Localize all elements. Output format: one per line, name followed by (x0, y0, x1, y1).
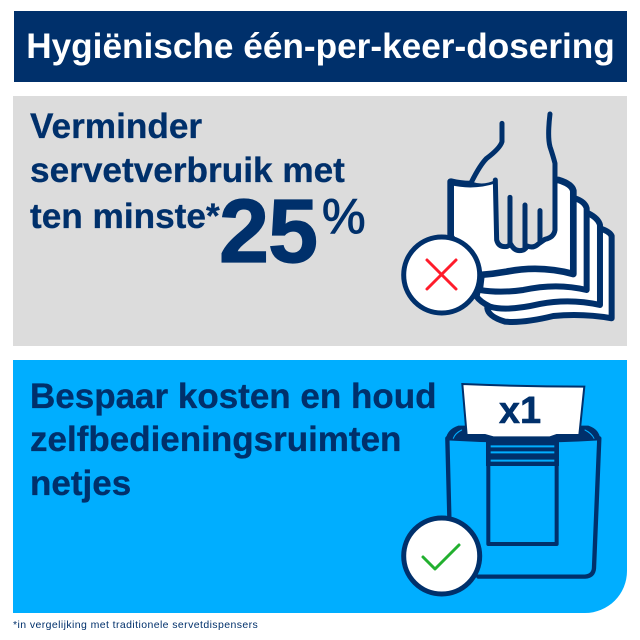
number 25: 25 (219, 182, 317, 282)
badge circle (404, 237, 480, 313)
heading: save costs: zelfbedieningsruimten (30, 420, 401, 459)
dispenser lid (447, 427, 599, 442)
back napkin 4 (487, 228, 612, 322)
front napkin (451, 180, 573, 275)
badge circle (404, 518, 480, 594)
footnote: *in vergelijking met traditionele servetdispensers (13, 619, 258, 631)
lid highlights (453, 430, 594, 438)
cross (427, 260, 456, 289)
icon: green check badge (404, 518, 480, 594)
heading: reduce napkin use: servetverbruik met (30, 151, 345, 190)
check mark (423, 545, 459, 569)
heading: save costs (30, 377, 436, 503)
icon: red cross badge (404, 237, 480, 313)
icon: stack of napkins with hand (451, 114, 612, 322)
wrist left (472, 123, 502, 182)
icon: dispenser (447, 384, 599, 577)
hand (472, 114, 555, 251)
heading: save costs: netjes (30, 464, 131, 503)
paper with x1 (462, 384, 584, 437)
back napkin 3 (477, 213, 600, 309)
back napkin 2 (480, 198, 587, 292)
window stripes (486, 437, 559, 466)
heading: save costs: Bespaar kosten en houd (30, 377, 436, 416)
title banner (14, 11, 627, 82)
label x1: x1 (499, 390, 541, 432)
panel: save costs (13, 360, 627, 613)
percent sign: % (322, 190, 366, 244)
dispenser body (447, 438, 599, 577)
stripe highlights (491, 446, 554, 461)
panel: reduce napkin use (13, 96, 627, 346)
heading: reduce napkin use: Verminder (30, 107, 202, 146)
inner window (488, 442, 557, 544)
wrist right and palm (545, 114, 555, 239)
statistic: 25 percent (219, 182, 366, 282)
heading: reduce napkin use: ten minste* (30, 197, 220, 236)
finger lines (510, 197, 540, 247)
title text: Hygiënische één-per-keer-dosering (26, 27, 615, 66)
heading: reduce napkin use (30, 107, 345, 236)
hand fill and outline (472, 114, 555, 251)
finger edge and fingertips (495, 180, 545, 251)
